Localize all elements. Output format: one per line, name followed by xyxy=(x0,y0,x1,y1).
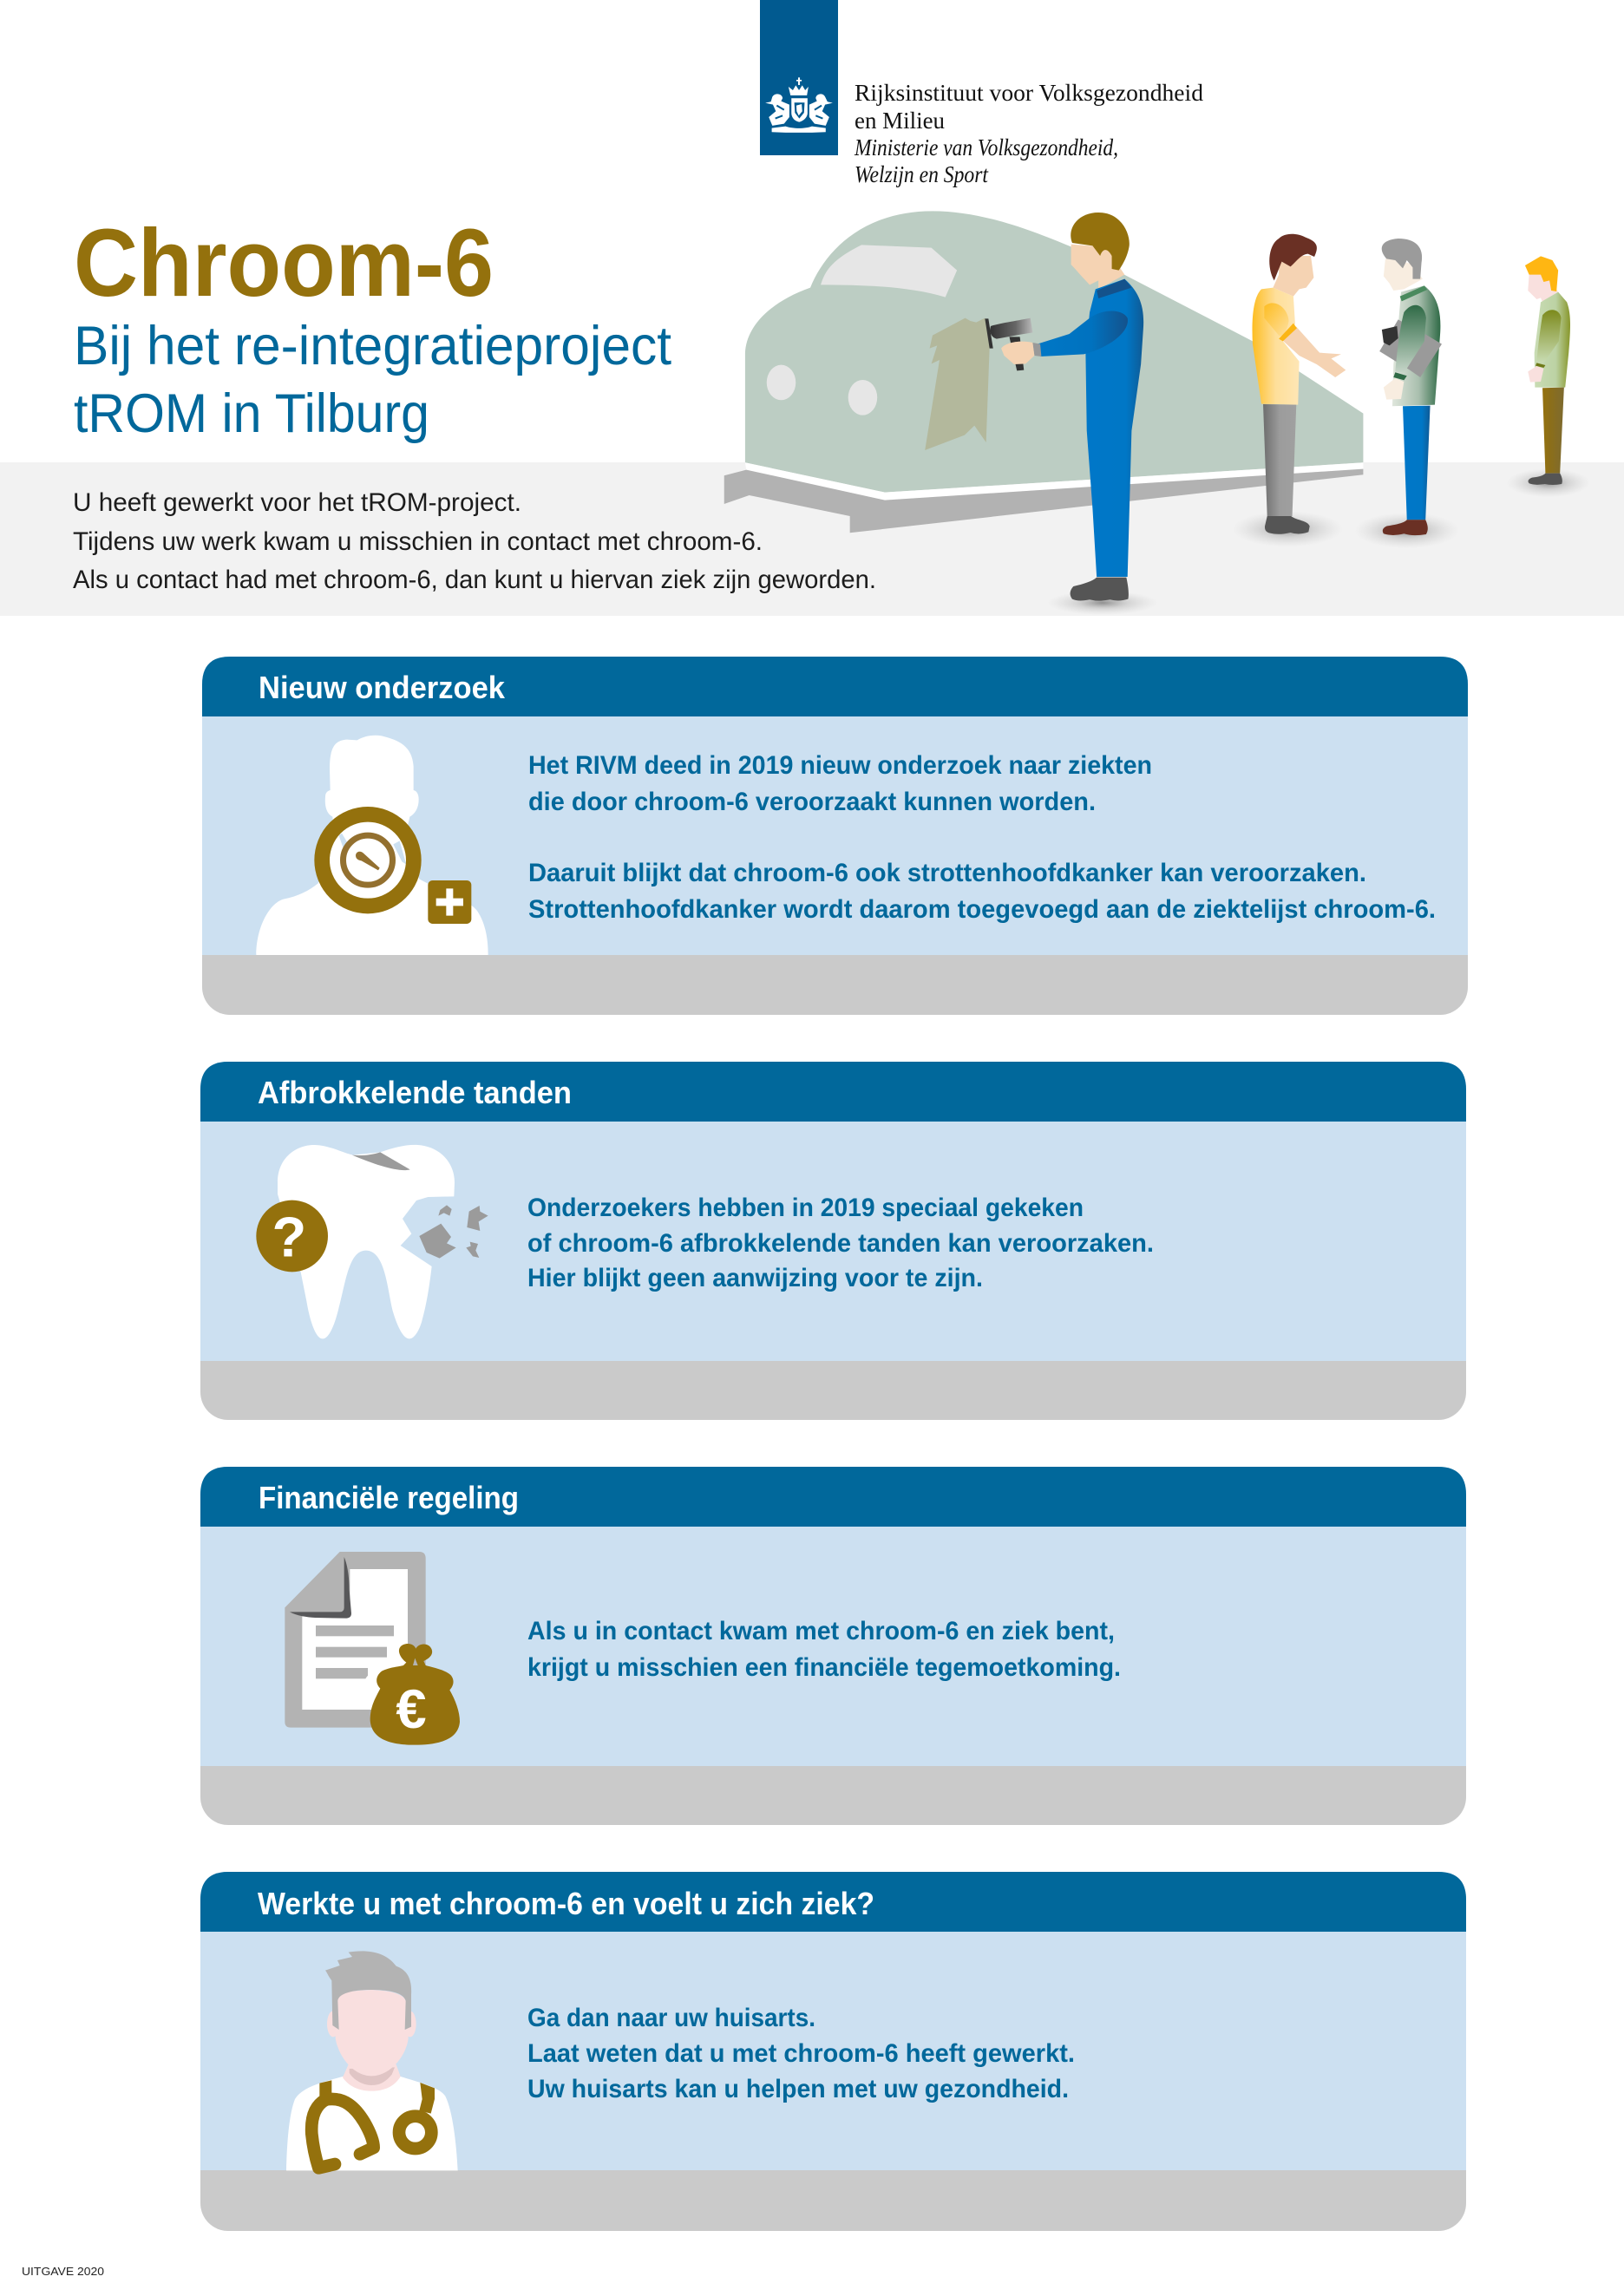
subtitle: Bij het re-integratieproject xyxy=(74,316,671,376)
icon: crumbling tooth xyxy=(256,1145,488,1338)
panel: Afbrokkelende tanden xyxy=(200,1062,1466,1420)
subtitle: tROM in Tilburg xyxy=(74,383,429,444)
panel text xyxy=(528,751,1436,924)
heading: Financiële regeling xyxy=(259,1480,519,1515)
panel text: Hier blijkt geen aanwijzing voor te zijn. xyxy=(527,1264,983,1292)
edition note: UITGAVE 2020 xyxy=(22,2265,104,2278)
panel text: Onderzoekers hebben in 2019 speciaal gekeken xyxy=(527,1194,1084,1222)
subtitle xyxy=(74,316,671,444)
logo: Rijksoverheid xyxy=(760,0,1203,187)
intro text xyxy=(73,488,876,594)
organisation name: en Milieu xyxy=(855,108,945,134)
icon: coat of arms xyxy=(765,77,833,133)
organisation name: Rijksinstituut voor Volksgezondheid xyxy=(855,80,1203,106)
intro text: Als u contact had met chroom-6, dan kunt u hiervan ziek zijn geworden. xyxy=(73,566,876,594)
heading bar xyxy=(200,1467,1466,1527)
organisation name: Welzijn en Sport xyxy=(855,161,989,187)
panel text: die door chroom-6 veroorzaakt kunnen worden. xyxy=(528,788,1096,816)
panel: Nieuw onderzoek xyxy=(202,657,1468,1015)
logo ribbon xyxy=(760,0,838,155)
train xyxy=(724,211,1363,533)
panel text: Daaruit blijkt dat chroom-6 ook strottenhoofdkanker kan veroorzaken. xyxy=(528,859,1366,887)
panel text: Uw huisarts kan u helpen met uw gezondheid. xyxy=(527,2075,1069,2103)
intro band xyxy=(0,462,1624,616)
title: Chroom-6 xyxy=(74,210,494,317)
panel text: of chroom-6 afbrokkelende tanden kan veroorzaken. xyxy=(527,1229,1154,1258)
panel text: Laat weten dat u met chroom-6 heeft gewerkt. xyxy=(527,2039,1075,2068)
intro text: Tijdens uw werk kwam u misschien in contact met chroom-6. xyxy=(73,527,763,556)
icon: document and purse: € xyxy=(396,1679,427,1740)
panel: Werkte u met chroom-6 en voelt u zich ziek? xyxy=(200,1872,1466,2231)
intro text: U heeft gewerkt voor het tROM-project. xyxy=(73,488,521,517)
heading bar xyxy=(200,1872,1466,1932)
worker in the distance xyxy=(1506,256,1590,497)
panel text: krijgt u misschien een financiële tegemoetkoming. xyxy=(527,1653,1121,1682)
worker in yellow shirt xyxy=(1232,234,1346,547)
worker with clipboard xyxy=(1354,239,1459,548)
panel text xyxy=(527,2004,1075,2103)
panel text: Strottenhoofdkanker wordt daarom toegevoegd aan de ziektelijst chroom-6. xyxy=(528,895,1436,924)
panel text xyxy=(527,1194,1154,1292)
panel text: Ga dan naar uw huisarts. xyxy=(527,2004,815,2032)
icon: doctor with stethoscope xyxy=(286,1951,458,2170)
organisation name xyxy=(854,80,1203,187)
heading bar xyxy=(202,657,1468,716)
icon: crumbling tooth: ? xyxy=(272,1206,306,1269)
heading: Afbrokkelende tanden xyxy=(258,1075,572,1110)
panel text: Als u in contact kwam met chroom-6 en ziek bent, xyxy=(527,1617,1115,1645)
worker with sander xyxy=(985,213,1158,615)
heading: Werkte u met chroom-6 en voelt u zich ziek? xyxy=(258,1886,874,1921)
illustration: train and workers xyxy=(724,211,1590,615)
organisation name: Ministerie van Volksgezondheid, xyxy=(854,134,1118,160)
heading: Nieuw onderzoek xyxy=(259,670,506,705)
icon: person with magnifier on throat xyxy=(256,736,488,955)
panel text: Het RIVM deed in 2019 nieuw onderzoek naar ziekten xyxy=(528,751,1152,780)
panel: Financiële regeling xyxy=(200,1467,1466,1825)
heading bar xyxy=(200,1062,1466,1122)
icon: document and purse xyxy=(285,1552,460,1745)
panel text xyxy=(527,1617,1121,1682)
